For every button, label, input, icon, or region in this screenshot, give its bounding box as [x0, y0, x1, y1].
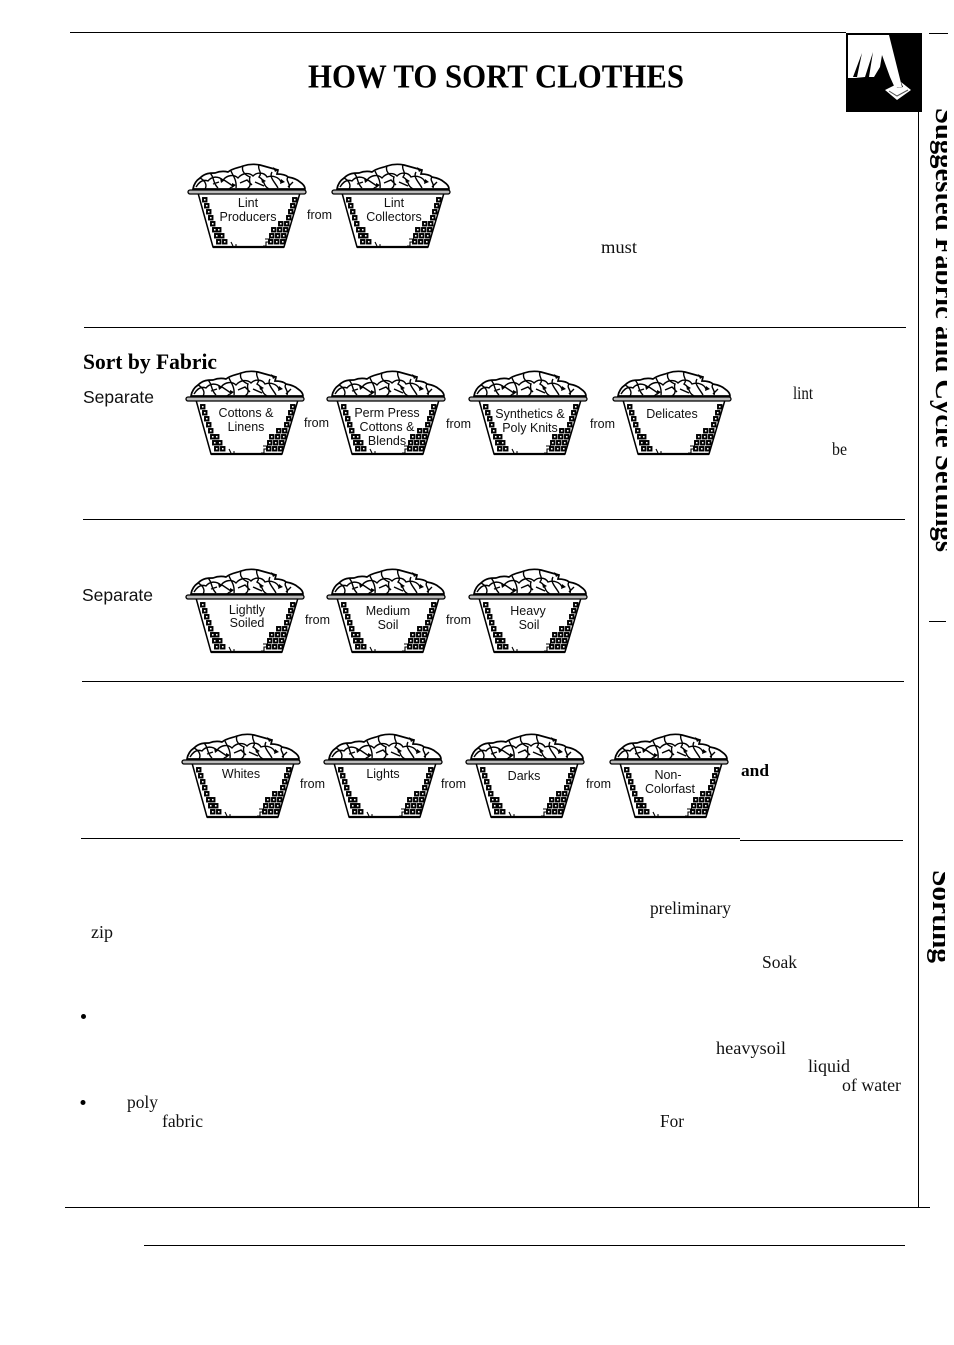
panel: sort by soil: [82, 569, 587, 652]
icon: hand pressing button: [846, 33, 922, 112]
basket: heavy soil: [469, 569, 587, 652]
basket: lint collectors: Lint: [384, 196, 405, 210]
basket: medium soil: [327, 569, 445, 652]
basket: lint collectors: Collectors: [366, 210, 422, 224]
text fragment: poly: poly: [127, 1092, 158, 1112]
basket: delicates: Delicates: [646, 407, 698, 421]
basket: lint producers: Lint: [238, 196, 259, 210]
basket: synthetics: Poly Knits: [502, 421, 558, 435]
basket: medium soil: Soil: [378, 618, 398, 632]
basket: darks: Darks: [508, 769, 540, 783]
basket: perm press: Cottons &: [360, 420, 415, 434]
basket: whites: Whites: [222, 767, 260, 781]
basket: synthetics: Synthetics &: [495, 407, 565, 421]
label: from: from: [300, 777, 325, 791]
panel: sort by lint: [188, 164, 637, 257]
label: separate: Separate: [83, 387, 154, 407]
basket: lightly soiled: Soiled: [230, 616, 264, 630]
bullet: [80, 1100, 86, 1105]
basket: heavy soil: Soil: [519, 618, 539, 632]
panel: sort by color: [182, 734, 770, 817]
basket: darks: [466, 734, 584, 817]
basket: synthetics: [469, 371, 587, 454]
text fragment: fabric: fabric: [162, 1111, 203, 1131]
basket: delicates: [613, 371, 731, 454]
basket: lint producers: [188, 164, 306, 247]
label: from: from: [590, 417, 615, 431]
basket: cottons and linens: Linens: [228, 420, 264, 434]
title: HOW TO SORT CLOTHES: [308, 58, 684, 96]
basket: perm press: Perm Press: [354, 406, 420, 420]
basket: perm press: Blends: [368, 434, 406, 448]
text fragment: liquid: liquid: [808, 1056, 850, 1076]
text fragment: must: must: [601, 237, 637, 257]
label: from: from: [304, 416, 329, 430]
text fragment: Soak: Soak: [762, 952, 797, 972]
basket: medium soil: Medium: [366, 604, 410, 618]
basket: cottons and linens: Cottons &: [219, 406, 274, 420]
label: from: from: [441, 777, 466, 791]
label: from: from: [586, 777, 611, 791]
text fragment: zip: zip: [91, 922, 113, 942]
label: from: from: [446, 613, 471, 627]
label: from: from: [446, 417, 471, 431]
basket: non-colorfast: [610, 734, 728, 817]
text fragment: and: and: [741, 761, 770, 780]
basket: perm press: [327, 371, 445, 454]
text block: sorting tips: [80, 898, 901, 1131]
label: separate: Separate: [82, 585, 153, 605]
panel: sort by fabric: [83, 371, 847, 459]
basket: lightly soiled: Lightly: [229, 603, 266, 617]
text fragment: heavysoil: heavysoil: [716, 1038, 786, 1058]
text fragment: For: For: [660, 1111, 684, 1131]
heading: sort by fabric: Sort by Fabric: [83, 349, 217, 374]
basket: lint producers: Producers: [220, 210, 276, 224]
label: from: from: [307, 208, 332, 222]
basket: heavy soil: Heavy: [510, 604, 546, 618]
basket: cottons and linens: [186, 371, 304, 454]
basket: whites: [182, 734, 300, 817]
basket: lights: [324, 734, 442, 817]
text fragment: be: be: [832, 439, 847, 459]
basket: lightly soiled: [186, 569, 304, 652]
bullet: [81, 1014, 86, 1019]
text fragment: of water: of water: [842, 1075, 901, 1095]
text fragment: lint: lint: [793, 383, 813, 403]
text fragment: preliminary: preliminary: [650, 898, 731, 918]
label: from: from: [305, 613, 330, 627]
basket: lights: Lights: [366, 767, 400, 781]
basket: non-colorfast: Non-: [654, 768, 682, 782]
basket: lint collectors: [332, 164, 450, 247]
basket: non-colorfast: Colorfast: [645, 782, 696, 796]
